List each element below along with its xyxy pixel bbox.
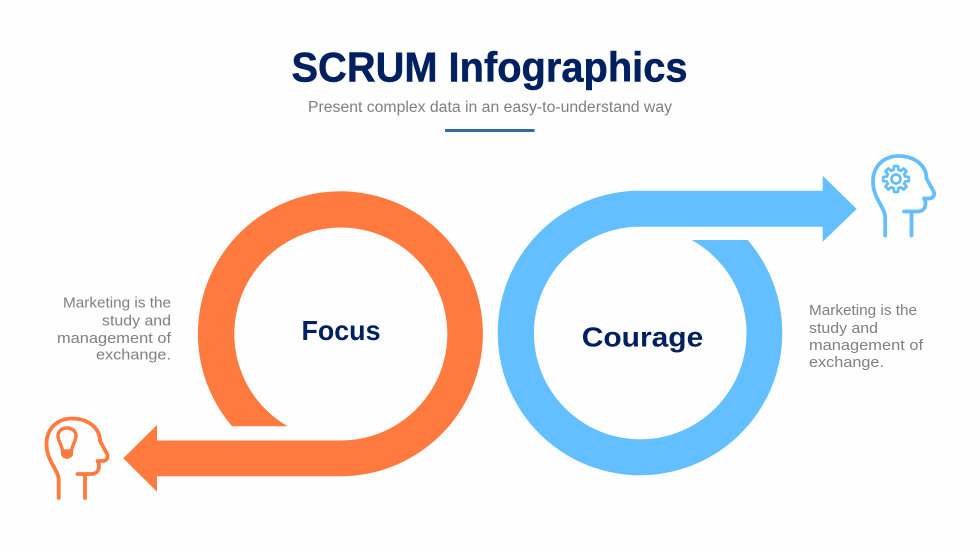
title underline [445,129,534,132]
left text block: exchange. [96,347,171,364]
left text block: study and [102,312,171,330]
left text block: Marketing is the [63,295,171,312]
right text block [809,302,924,371]
icon: head with gear [873,156,934,236]
subtitle: Present complex data in an easy-to-understand way [308,99,672,116]
label: Focus: Focus [302,315,380,346]
left text block: management of [57,330,172,347]
orange looped arrow [123,191,483,492]
right text block: Marketing is the [809,302,917,319]
right text block: exchange. [809,354,884,371]
blue looped arrow [498,176,857,475]
icon: head with light bulb [46,418,108,498]
left text block [57,295,172,364]
title: SCRUM Infographics [292,44,688,90]
right text block: management of [809,337,924,354]
right text block: study and [809,320,878,337]
label: Courage: Courage [582,322,703,353]
